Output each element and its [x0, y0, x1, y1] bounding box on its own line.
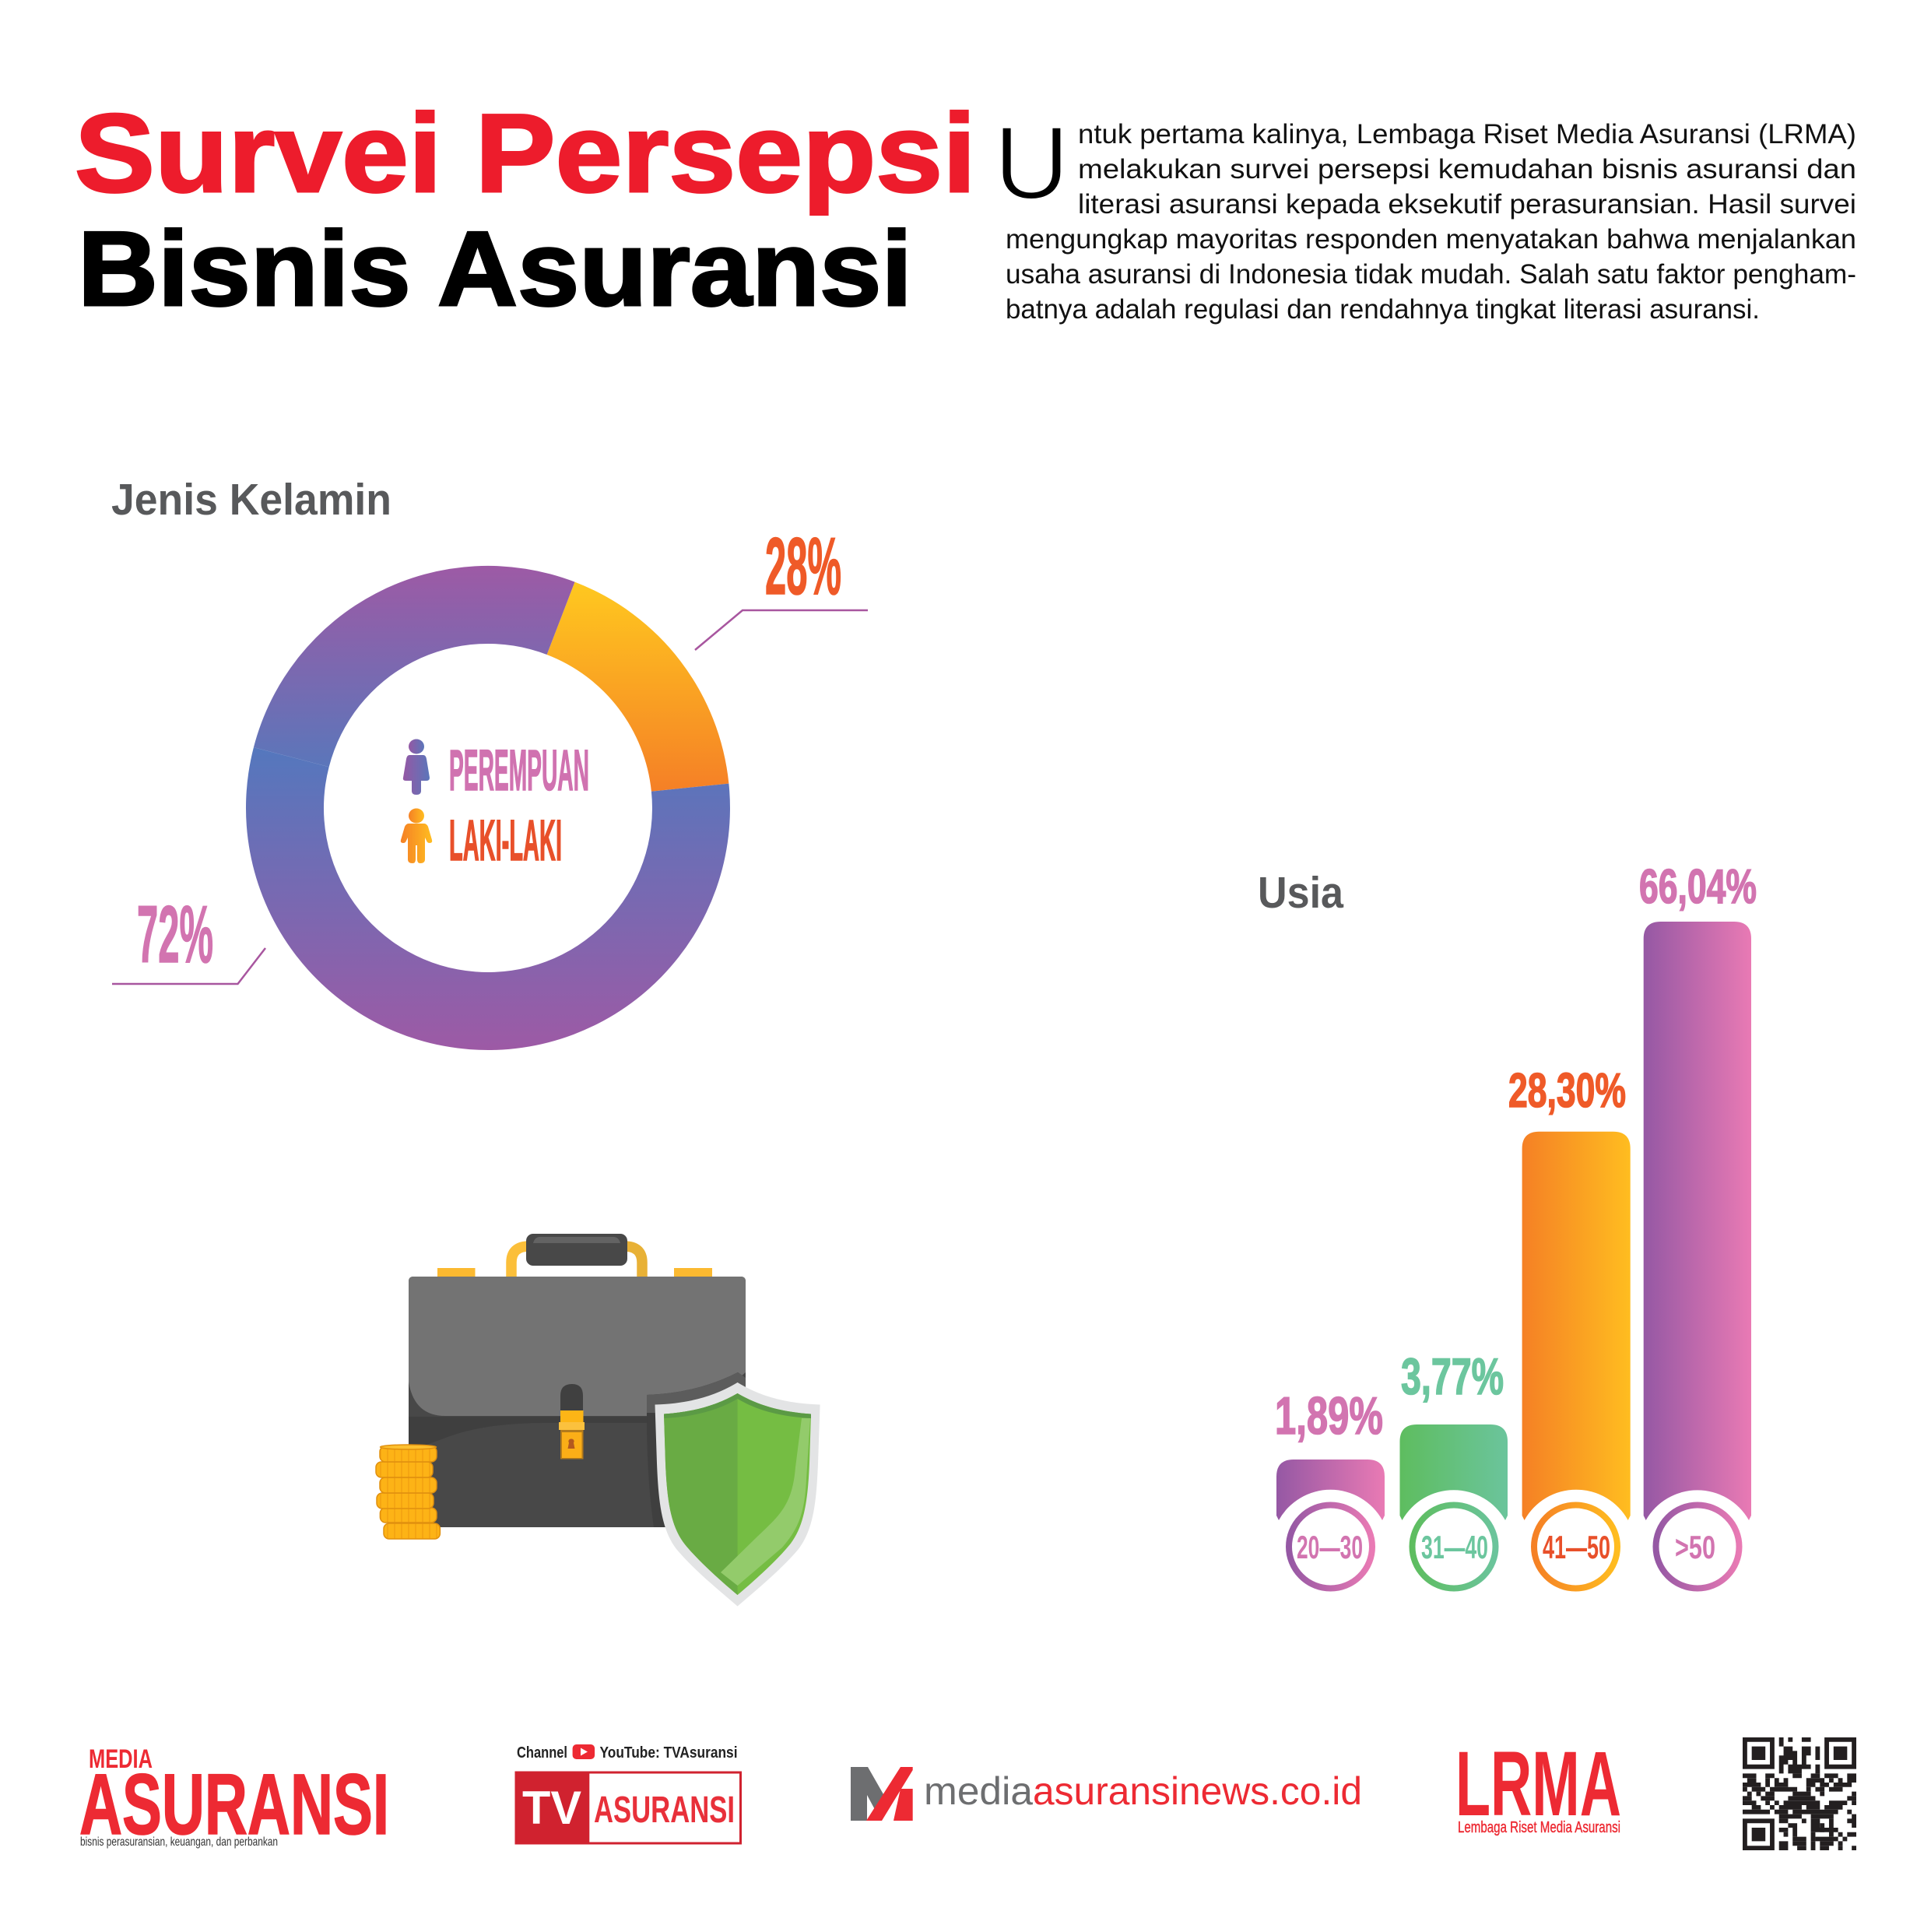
logo: mediaasuransinews.co.id: media: [924, 1769, 1033, 1813]
bar: 20-30: 20—30: [1297, 1529, 1363, 1565]
bar: 31-40: [1399, 1347, 1508, 1588]
logo: Media Asuransi: MEDIA: [89, 1744, 153, 1774]
bar: >50: 66,04%: [1639, 860, 1757, 914]
logo: TV Asuransi: TV: [522, 1782, 581, 1834]
title line 2: Bisnis Asuransi: [78, 209, 912, 328]
title: [75, 92, 976, 328]
intro paragraph: mengungkap mayoritas responden menyatakan bahwa menjalankan: [1006, 224, 1856, 255]
logo: mediaasuransinews.co.id: asuransinews.co.id: [1033, 1769, 1362, 1813]
clasps: [437, 1268, 475, 1277]
youtube channel line: [517, 1744, 738, 1762]
intro paragraph: batnya adalah regulasi dan rendahnya tingkat literasi asuransi.: [1006, 294, 1760, 325]
handle grip: [526, 1234, 627, 1266]
shield: [655, 1382, 820, 1607]
icon: female: [403, 739, 430, 795]
tv box: [516, 1772, 741, 1843]
title line 1: Survei Persepsi: [75, 92, 976, 216]
legend: laki-laki: [401, 808, 562, 873]
legend: perempuan: [403, 738, 589, 803]
intro paragraph: literasi asuransi kepada eksekutif perasuransian. Hasil survei: [1078, 189, 1856, 220]
youtube channel line: Channel: [517, 1744, 567, 1762]
bar: >50: [1639, 860, 1757, 1588]
logo: LRMA: LRMA: [1455, 1733, 1621, 1835]
bar: 41-50: 41—50: [1543, 1529, 1610, 1565]
heading: Usia: Usia: [1258, 868, 1344, 918]
logo: Media Asuransi: [79, 1744, 389, 1853]
logo: TV Asuransi: [515, 1744, 741, 1844]
shield shadow on case: [647, 1372, 746, 1527]
youtube channel line: YouTube: TVAsuransi: [599, 1744, 738, 1762]
bar: >50: >50: [1675, 1529, 1715, 1565]
paragraph text: ntuk pertama kalinya, Lembaga Riset Media Asuransi (LRMA): [1078, 119, 1856, 149]
logo: Media Asuransi: bisnis perasuransian, keuangan, dan perbankan: [80, 1835, 278, 1849]
case body: [409, 1277, 746, 1527]
bar: 31-40: 3,77%: [1401, 1347, 1504, 1405]
case flap: [409, 1277, 746, 1416]
text: PEREMPUAN: [449, 738, 589, 803]
intro paragraph: melakukan survei persepsi kemudahan bisnis asuransi dan: [1078, 154, 1856, 184]
illustration: briefcase, coins and shield: [376, 1234, 820, 1607]
bar: 31-40: 31—40: [1421, 1529, 1488, 1565]
callout: 72%: [112, 890, 265, 984]
bar: 41-50: 28,30%: [1508, 1064, 1626, 1118]
callout: 28%: 28%: [765, 522, 841, 612]
qr code: [1743, 1737, 1856, 1850]
handle: [511, 1246, 642, 1277]
logo: TV Asuransi: ASURANSI: [594, 1790, 735, 1831]
lock: [559, 1384, 585, 1459]
logo: LRMA: [1455, 1733, 1621, 1836]
bar: 20-30: [1275, 1386, 1385, 1588]
text: LAKI-LAKI: [449, 808, 562, 873]
intro paragraph: usaha asuransi di Indonesia tidak mudah. Salah satu faktor pengham-: [1006, 259, 1856, 290]
callout: 72%: 72%: [137, 890, 213, 980]
icon: M mark: [851, 1767, 913, 1821]
segment: perempuan lower: [246, 747, 730, 1050]
segment: laki-laki 28%: [547, 582, 729, 792]
drop cap: U: [994, 106, 1069, 221]
heading: Jenis Kelamin: Jenis Kelamin: [111, 475, 391, 525]
bar chart: usia: [1275, 860, 1757, 1588]
intro paragraph: [994, 106, 1856, 325]
callout: 28%: [695, 522, 868, 650]
logo: mediaasuransinews.co.id: [851, 1767, 1362, 1821]
donut chart: [246, 566, 730, 1050]
icon: male: [401, 808, 432, 863]
coins: [376, 1445, 440, 1539]
bar: 20-30: 1,89%: [1275, 1386, 1383, 1445]
bar: 41-50: [1508, 1064, 1631, 1588]
logo: Media Asuransi: ASURANSI: [79, 1757, 389, 1853]
segment: perempuan upper: [254, 566, 574, 767]
logo: LRMA: Lembaga Riset Media Asuransi: [1458, 1819, 1620, 1836]
